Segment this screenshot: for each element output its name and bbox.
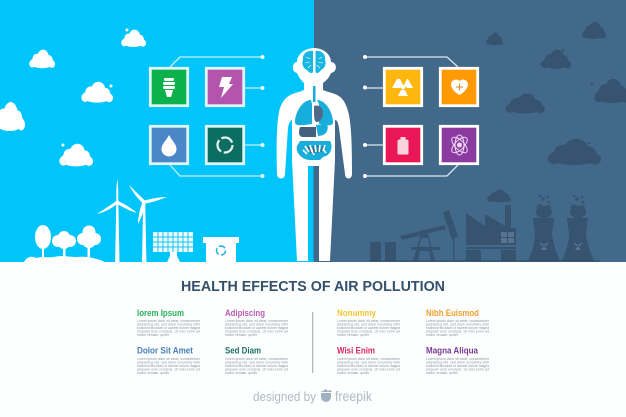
footer credit (253, 389, 372, 404)
text block: magna aliqua: Magna Aliqua (426, 346, 479, 356)
panel: polluted environment background (314, 0, 626, 262)
text block: lorem ipsum: aliquam erat volutpat. Ut wisi enim ad (137, 330, 200, 334)
white clouds (0, 28, 146, 166)
text block: sed diam: adipiscing elit, sed diam nonummy nibh (225, 360, 288, 364)
panel: clean environment background (0, 0, 314, 262)
trachea and lungs (295, 86, 333, 125)
text block: adipiscing: minim veniam, quiter (225, 333, 258, 337)
text block: sed diam: Lorem ipsum dolor sit amet, consectetuer (225, 357, 289, 361)
text block: wisi enim: aliquam erat volutpat. Ut wisi enim ad (337, 368, 400, 372)
icon: freepik logo (320, 389, 332, 402)
power batteries silhouette (370, 242, 396, 261)
text block: nonummy: adipiscing elit, sed diam nonummy nibh (337, 322, 400, 326)
trees (35, 225, 101, 259)
text block: nonummy (337, 308, 401, 337)
text block: adipiscing: Lorem ipsum dolor sit amet, consectetuer (225, 319, 289, 323)
text block: nonummy: minim veniam, quiter (337, 333, 370, 337)
text block: nibh euismod: adipiscing elit, sed diam nonummy nibh (426, 322, 489, 326)
text block: sed diam: minim veniam, quiter (225, 371, 258, 375)
text block: wisi enim: euismod tincidunt ut laoreet dolore magna (337, 364, 400, 368)
icon tile: orange heart (440, 68, 478, 106)
text block: nonummy: Nonummy (337, 308, 376, 318)
icon tile: teal recycle (206, 126, 244, 164)
ground bumps (24, 256, 105, 262)
spine strips (308, 166, 319, 261)
human body silhouette (277, 48, 352, 261)
text block: nibh euismod: Nibh Euismod (426, 308, 479, 318)
text block: dolor sit amet: Dolor Sit Amet (137, 346, 193, 356)
connector lines right (363, 55, 458, 178)
text block: magna aliqua: euismod tincidunt ut laoreet dolore magna (426, 364, 489, 368)
text block: adipiscing (225, 308, 289, 337)
intestines (297, 141, 332, 160)
icon tile: yellow radiation (384, 68, 422, 106)
text block: dolor sit amet (137, 346, 201, 375)
heart (314, 105, 323, 122)
dark clouds (486, 22, 626, 202)
icon tile: red bottle (384, 126, 422, 164)
text block: magna aliqua (426, 346, 490, 375)
recycling bin (203, 237, 239, 262)
text block: dolor sit amet: euismod tincidunt ut laoreet dolore magna (137, 364, 200, 368)
text block: nibh euismod (426, 308, 490, 337)
stomach (299, 127, 316, 137)
text block: adipiscing: euismod tincidunt ut laoreet dolore magna (225, 326, 288, 330)
text block: lorem ipsum: euismod tincidunt ut laoreet dolore magna (137, 326, 200, 330)
oil pump silhouette (400, 210, 458, 261)
text block: wisi enim: Wisi Enim (337, 346, 375, 356)
icon tile: purple lightning (206, 68, 244, 106)
text block: magna aliqua: minim veniam, quiter (426, 371, 459, 375)
center divider (312, 312, 313, 373)
text block: sed diam: euismod tincidunt ut laoreet dolore magna (225, 364, 288, 368)
factory silhouette (466, 205, 516, 261)
footer credit: designed by (253, 390, 317, 404)
ground line (370, 260, 600, 262)
text block: sed diam (225, 346, 289, 375)
title: HEALTH EFFECTS OF AIR POLLUTION (181, 279, 445, 295)
text block: lorem ipsum: lorem Ipsum (137, 308, 184, 318)
text block: wisi enim: Lorem ipsum dolor sit amet, consectetuer (337, 357, 401, 361)
text block: magna aliqua: Lorem ipsum dolor sit amet, consectetuer (426, 357, 490, 361)
text block: nibh euismod: Lorem ipsum dolor sit amet, consectetuer (426, 319, 490, 323)
text block: dolor sit amet: minim veniam, quiter (137, 371, 170, 375)
icon tile: purple atom (440, 126, 478, 164)
text block: lorem ipsum (137, 308, 201, 337)
text block: sed diam: Sed Diam (225, 346, 261, 356)
text block: dolor sit amet: Lorem ipsum dolor sit amet, consectetuer (137, 357, 201, 361)
text block: magna aliqua: adipiscing elit, sed diam nonummy nibh (426, 360, 489, 364)
text block: magna aliqua: aliquam erat volutpat. Ut wisi enim ad (426, 368, 489, 372)
text block: adipiscing: Adipiscing (225, 308, 265, 318)
text block: nonummy: aliquam erat volutpat. Ut wisi enim ad (337, 330, 400, 334)
text block: lorem ipsum: adipiscing elit, sed diam nonummy nibh (137, 322, 200, 326)
text block: wisi enim: adipiscing elit, sed diam nonummy nibh (337, 360, 400, 364)
footer credit: freepik (335, 389, 372, 404)
text block: lorem ipsum: minim veniam, quiter (137, 333, 170, 337)
text block: nibh euismod: minim veniam, quiter (426, 333, 459, 337)
solar panel (153, 232, 193, 262)
brain (302, 51, 326, 73)
text block: nibh euismod: euismod tincidunt ut laoreet dolore magna (426, 326, 489, 330)
text block: lorem ipsum: Lorem ipsum dolor sit amet, consectetuer (137, 319, 201, 323)
text block: adipiscing: aliquam erat volutpat. Ut wisi enim ad (225, 330, 288, 334)
text block: wisi enim (337, 346, 401, 375)
text block: wisi enim: minim veniam, quiter (337, 371, 370, 375)
text block: dolor sit amet: adipiscing elit, sed diam nonummy nibh (137, 360, 200, 364)
icon tile: green bulb (150, 68, 188, 106)
text block: nibh euismod: aliquam erat volutpat. Ut wisi enim ad (426, 330, 489, 334)
cooling towers silhouette (528, 195, 594, 261)
text block: nonummy: euismod tincidunt ut laoreet dolore magna (337, 326, 400, 330)
liver (316, 124, 328, 136)
icon tile: blue water drop (150, 126, 188, 164)
wind turbines (97, 179, 167, 262)
text block: adipiscing: adipiscing elit, sed diam nonummy nibh (225, 322, 288, 326)
text block: nonummy: Lorem ipsum dolor sit amet, consectetuer (337, 319, 401, 323)
connector lines left (170, 55, 264, 178)
text block: sed diam: aliquam erat volutpat. Ut wisi enim ad (225, 368, 288, 372)
text block: dolor sit amet: aliquam erat volutpat. Ut wisi enim ad (137, 368, 200, 372)
